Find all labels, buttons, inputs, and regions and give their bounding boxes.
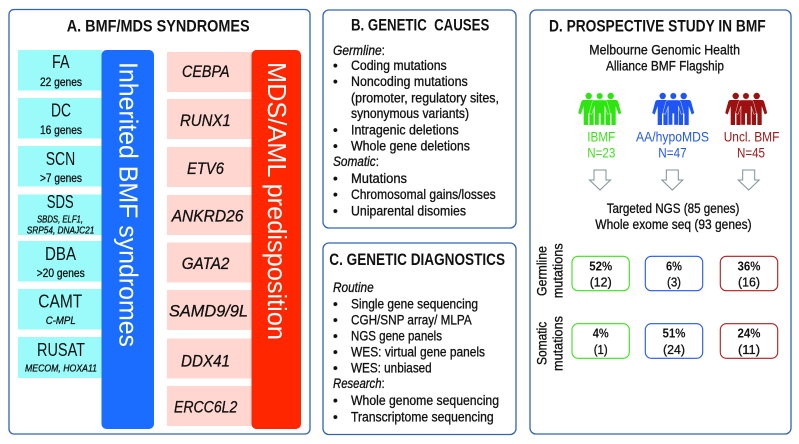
group label: AA/hypoMDS: AA/hypoMDS: [636, 130, 709, 145]
panel B: genetic causes: [323, 10, 516, 228]
row label: germline mutations: Germline: [535, 246, 550, 296]
inherited BMF syndrome boxes: >7 genes: [40, 171, 82, 185]
sequencing methods: Whole exome seq (93 genes): [595, 217, 752, 232]
MDS/AML predisposition gene boxes: DDX41: [181, 352, 230, 371]
germline result: IBMF: 52%: [589, 259, 613, 274]
somatic list: Somatic:: [333, 154, 379, 169]
research list: Transcriptome sequencing: [351, 409, 494, 424]
somatic result: Uncl. BMF: [720, 324, 778, 358]
research list: Whole genome sequencing: [351, 393, 499, 408]
bar: inherited BMF syndromes: [102, 50, 154, 429]
panel A: BMF/MDS syndromes: [9, 10, 310, 434]
inherited BMF syndrome boxes: C-MPL: [46, 315, 76, 327]
row label: somatic mutations: [535, 316, 566, 371]
germline result: AA/hypoMDS: 6%: [666, 259, 682, 274]
inherited BMF syndrome boxes: 22 genes: [40, 75, 82, 89]
somatic result: IBMF: [572, 324, 629, 358]
arrow: AA/hypoMDS: [662, 170, 683, 190]
bar: MDS/AML predisposition: MDS/AML predisposition: [262, 62, 292, 340]
group label: AA/hypoMDS: N=47: [658, 146, 687, 161]
icon: green people: [578, 93, 621, 125]
somatic result: Uncl. BMF: 24%: [738, 326, 761, 341]
inherited BMF syndrome boxes: [18, 50, 102, 378]
group label: IBMF: N=23: [587, 146, 615, 161]
inherited BMF syndrome boxes: SRP54, DNAJC21: [27, 226, 94, 236]
research list: •: [333, 409, 338, 424]
routine list: •: [333, 296, 338, 311]
routine list: WES: unbiased: [351, 361, 432, 376]
somatic list: Uniparental disomies: [351, 204, 466, 218]
somatic list: Mutations: [351, 171, 407, 186]
research list: [333, 376, 499, 424]
routine list: •: [333, 361, 338, 376]
germline result: Uncl. BMF: 36%: [738, 259, 761, 274]
study name: Alliance BMF Flagship: [606, 58, 724, 73]
group label: IBMF: [587, 130, 615, 161]
row label: germline mutations: [535, 243, 566, 298]
germline list: •: [333, 122, 338, 138]
somatic list: •: [333, 204, 338, 218]
routine list: •: [333, 329, 338, 344]
inherited BMF syndrome boxes: FA: [52, 52, 70, 72]
germline result: Uncl. BMF: (16): [738, 275, 760, 290]
MDS/AML predisposition gene boxes: ETV6: [187, 159, 224, 178]
group label: Uncl. BMF: N=45: [737, 146, 765, 161]
routine list: CGH/SNP array/ MLPA: [351, 312, 472, 327]
germline list: Whole gene deletions: [351, 138, 470, 154]
routine list: Routine: [333, 280, 374, 295]
somatic result: Uncl. BMF: (11): [738, 342, 760, 357]
inherited BMF syndrome boxes: 16 genes: [40, 123, 82, 137]
germline list: [333, 43, 499, 154]
research list: •: [333, 393, 338, 408]
germline list: •: [333, 138, 338, 154]
germline list: synonymous variants): [351, 106, 469, 121]
study name: [589, 42, 740, 73]
inherited BMF syndrome boxes: CAMT: [38, 292, 82, 312]
routine list: NGS gene panels: [351, 329, 442, 344]
row label: germline mutations: mutations: [551, 243, 566, 298]
group label: AA/hypoMDS: [636, 130, 709, 161]
germline result: IBMF: (12): [590, 275, 612, 290]
MDS/AML predisposition gene boxes: RUNX1: [180, 111, 231, 130]
inherited BMF syndrome boxes: SDS: [47, 192, 74, 212]
MDS/AML predisposition gene boxes: GATA2: [182, 254, 230, 273]
somatic result: AA/hypoMDS: [645, 324, 703, 358]
panel D: prospective study in BMF: [530, 10, 791, 434]
routine list: [333, 280, 485, 376]
row label: somatic mutations: mutations: [551, 316, 566, 371]
somatic list: •: [333, 171, 338, 186]
MDS/AML predisposition gene boxes: ANKRD26: [171, 207, 244, 226]
germline list: (promoter, regulatory sites,: [351, 90, 499, 106]
inherited BMF syndrome boxes: MECOM, HOXA11: [25, 364, 97, 375]
germline list: Noncoding mutations: [351, 74, 468, 89]
heading A: A. BMF/MDS SYNDROMES: [67, 16, 250, 36]
inherited BMF syndrome boxes: DBA: [45, 244, 76, 264]
germline list: •: [333, 74, 338, 89]
icon: blue people: [652, 93, 694, 125]
inherited BMF syndrome boxes: RUSAT: [37, 340, 85, 360]
MDS/AML predisposition gene boxes: SAMD9/9L: [169, 302, 248, 321]
row label: somatic mutations: Somatic: [535, 321, 550, 365]
somatic result: AA/hypoMDS: (24): [663, 342, 685, 357]
sequencing methods: Targeted NGS (85 genes): [607, 201, 739, 216]
research list: Research:: [333, 376, 385, 391]
group label: Uncl. BMF: [724, 130, 779, 161]
routine list: •: [333, 345, 338, 360]
heading B: B. GENETIC CAUSES: [351, 16, 489, 34]
sequencing methods: [595, 201, 752, 232]
germline result: IBMF: [572, 256, 629, 291]
somatic result: AA/hypoMDS: 51%: [662, 326, 686, 341]
inherited BMF syndrome boxes: >20 genes: [37, 266, 85, 280]
arrow: IBMF: [590, 170, 610, 190]
bar: MDS/AML predisposition: [252, 50, 301, 429]
somatic result: IBMF: (1): [594, 342, 608, 357]
germline list: Coding mutations: [351, 58, 447, 73]
germline result: AA/hypoMDS: [645, 256, 703, 291]
group label: IBMF: IBMF: [587, 130, 615, 145]
routine list: WES: virtual gene panels: [351, 345, 485, 360]
heading C: C. GENETIC DIAGNOSTICS: [329, 250, 505, 269]
germline list: Intragenic deletions: [351, 122, 459, 138]
germline result: AA/hypoMDS: (3): [667, 275, 681, 290]
routine list: •: [333, 312, 338, 327]
study name: Melbourne Genomic Health: [589, 42, 740, 57]
somatic list: [333, 154, 496, 218]
inherited BMF syndrome boxes: DC: [51, 100, 71, 120]
somatic list: •: [333, 187, 338, 202]
MDS/AML predisposition gene boxes: CEBPA: [182, 62, 230, 81]
germline result: Uncl. BMF: [720, 256, 778, 291]
somatic result: IBMF: 4%: [593, 326, 609, 341]
panel C: genetic diagnostics: [323, 243, 516, 434]
inherited BMF syndrome boxes: SBDS, ELF1,: [37, 215, 83, 226]
inherited BMF syndrome boxes: SCN: [46, 149, 75, 169]
icon: red people: [725, 93, 767, 125]
germline list: •: [333, 58, 338, 73]
arrow: Uncl. BMF: [738, 170, 759, 190]
routine list: Single gene sequencing: [351, 296, 478, 311]
germline list: Germline:: [333, 43, 385, 58]
bar: inherited BMF syndromes: Inherited BMF syndromes: [114, 62, 144, 347]
group label: Uncl. BMF: Uncl. BMF: [724, 130, 779, 145]
MDS/AML predisposition gene boxes: ERCC6L2: [174, 398, 238, 417]
MDS/AML predisposition gene boxes: [167, 52, 252, 426]
somatic list: Chromosomal gains/losses: [351, 187, 496, 202]
